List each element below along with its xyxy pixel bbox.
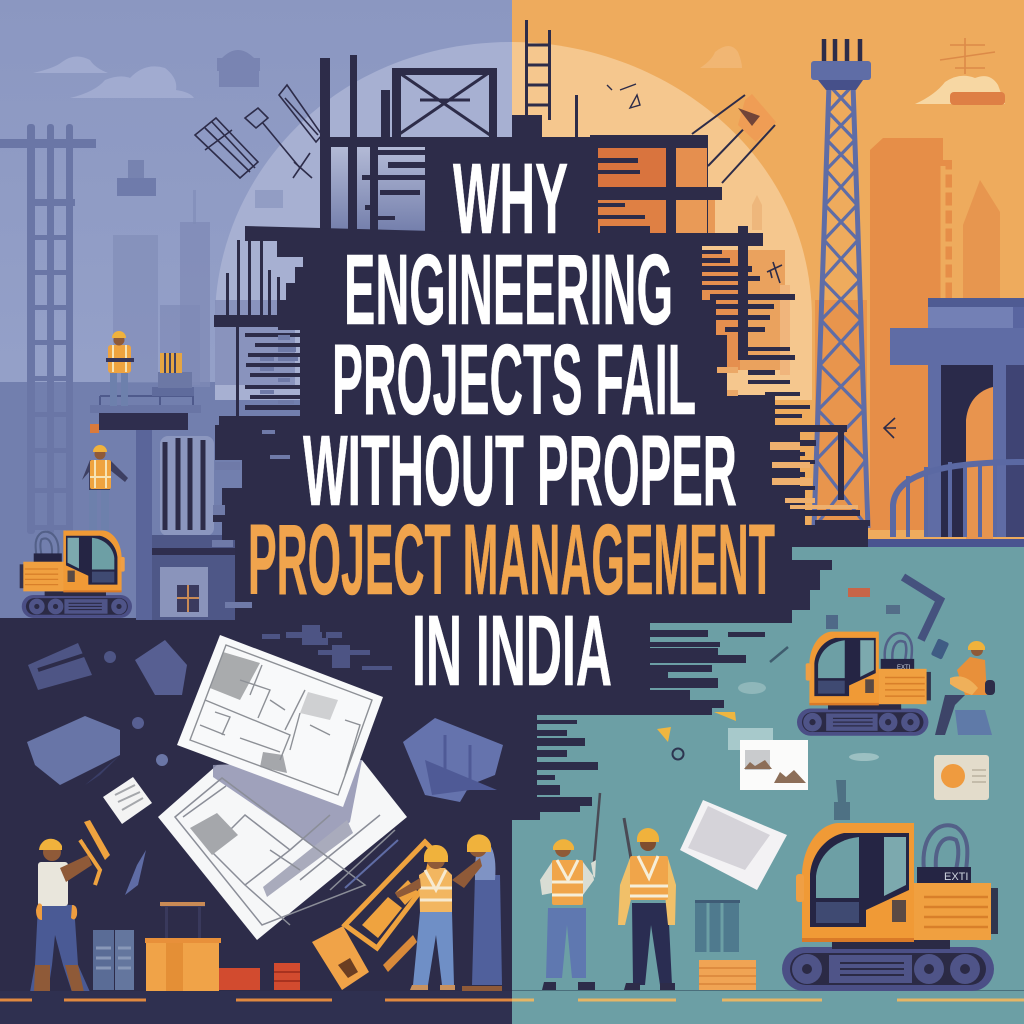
- floating stack of materials: [217, 50, 260, 87]
- small paper card: [103, 777, 152, 824]
- dial card: [934, 755, 989, 800]
- railing: [893, 462, 1024, 537]
- jagged dark centre mass: [213, 226, 868, 820]
- dark strips: right edge: [700, 226, 870, 526]
- orange skyline: [595, 138, 1000, 530]
- red boxes: [219, 963, 300, 990]
- blueprint sheet: upper: [177, 635, 383, 807]
- storage units and orange crate: [695, 900, 756, 990]
- dark strips: left edge: [214, 315, 310, 425]
- plate label: small excavator: EXTI: [897, 665, 911, 671]
- light strip accents: left edge: [212, 335, 298, 608]
- floating blue machine parts: [27, 640, 503, 895]
- cloud: faint upper right: [700, 46, 742, 68]
- low building: [152, 535, 237, 620]
- worker with pole: right: [618, 818, 676, 990]
- road: dark side: [0, 991, 512, 1024]
- floating tools: blue side: [195, 85, 322, 178]
- road: teal side: [512, 990, 1024, 1000]
- lattice tower: [811, 39, 871, 528]
- bent arm: [903, 577, 940, 640]
- small black arrows and sticks: [767, 262, 896, 438]
- floating girder grid: [738, 94, 776, 142]
- seated worker: [935, 641, 995, 735]
- worker on platform: [106, 331, 134, 406]
- top scaffolding: [320, 20, 578, 238]
- clouds: upper left: [33, 56, 194, 98]
- title line 6: IN INDIA: [412, 595, 612, 707]
- title: [248, 143, 775, 707]
- tilted paper sheet: [680, 800, 787, 890]
- title: WHY: [453, 143, 568, 255]
- floating tools: orange side: [607, 84, 775, 183]
- large excavator: [782, 823, 998, 991]
- scaffold tower: left: [0, 124, 96, 534]
- panel: blue top-left sky: [0, 0, 512, 622]
- white photo card: [728, 728, 808, 790]
- title: ENGINEERING: [344, 234, 673, 346]
- exhaust silhouette: [834, 780, 850, 820]
- small floating icons: teal: [657, 588, 949, 761]
- binders: [93, 930, 134, 990]
- sun disc: right half: [512, 42, 812, 400]
- panel: teal bottom-right ground: [512, 547, 1024, 1024]
- two workers: bottom centre: [395, 834, 502, 991]
- panel: orange top-right sky: [512, 0, 1024, 548]
- upper dark block with windows: [320, 135, 722, 237]
- small excavator: upper left: [20, 531, 132, 618]
- tilted orange machine: [312, 840, 433, 990]
- sun disc: left half: [215, 42, 512, 400]
- base strip: [868, 539, 1024, 547]
- worker with tool: bottom left: [30, 820, 110, 992]
- plate label: large excavator: EXTI: [944, 871, 968, 883]
- small excavator: right: [797, 632, 931, 736]
- orange strips: right edge: [770, 442, 858, 509]
- worker on excavator: [82, 445, 128, 531]
- worker with pole: left: [540, 793, 600, 990]
- blue building: [890, 298, 1024, 540]
- scaffold uprights: left: [226, 238, 280, 417]
- platform and column: [90, 353, 201, 620]
- teal cut-ins: [665, 625, 710, 641]
- floating strips above the blueprints: [262, 625, 392, 670]
- water tank: [160, 436, 214, 536]
- faded city skyline: blue: [113, 160, 295, 387]
- panel: dark bottom-left ground: [0, 618, 512, 1024]
- cloud with sign: [915, 38, 1005, 105]
- orange crate and stand: [145, 902, 221, 991]
- dark strips: teal edge: [537, 630, 765, 820]
- blueprint sheet: lower: [158, 760, 407, 940]
